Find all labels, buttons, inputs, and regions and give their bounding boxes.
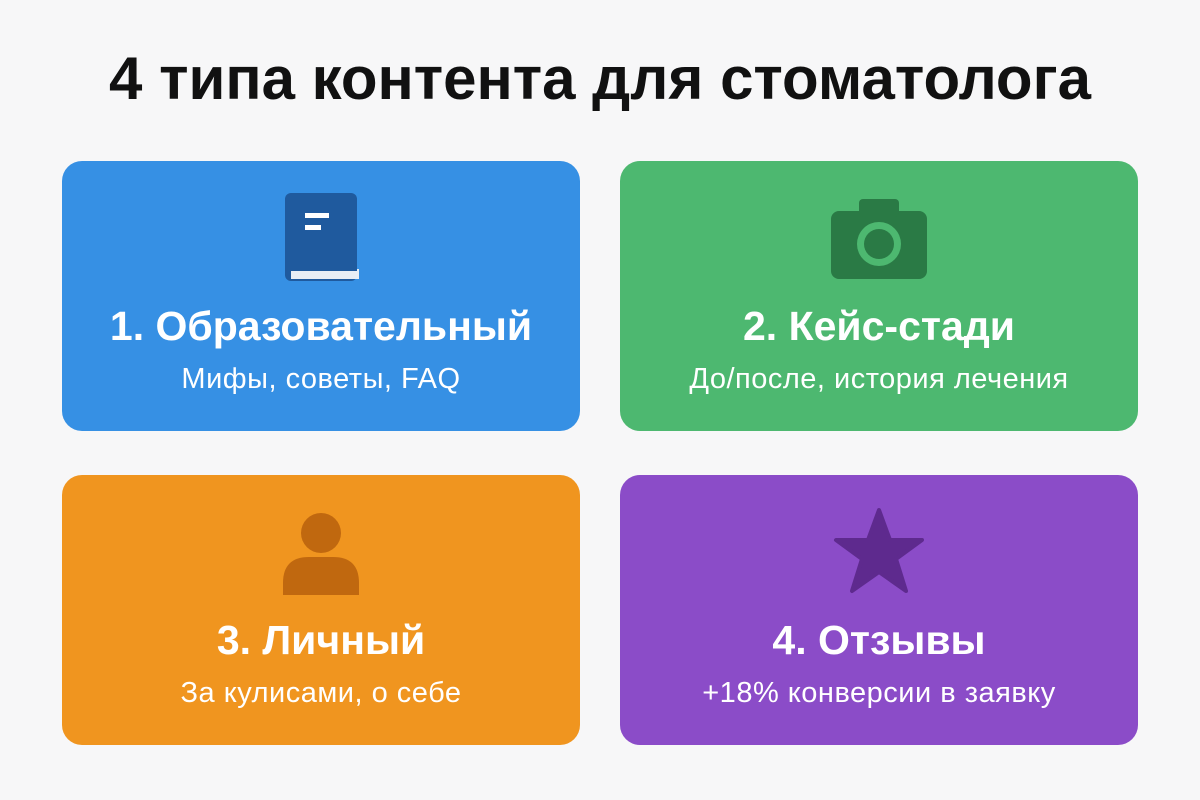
heading: 2. Кейс-стади	[743, 303, 1015, 349]
heading: 1. Образовательный	[110, 303, 532, 349]
panel: reviews	[620, 475, 1138, 745]
subtitle: Мифы, советы, FAQ	[181, 363, 461, 395]
subtitle: До/после, история лечения	[689, 363, 1069, 395]
icon: book	[285, 193, 359, 281]
icon: person	[283, 513, 359, 595]
subtitle: +18% конверсии в заявку	[702, 677, 1056, 709]
subtitle: За кулисами, о себе	[180, 677, 461, 709]
panel: case study	[620, 161, 1138, 431]
title: 4 типа контента для стоматолога	[109, 45, 1091, 112]
icon: camera	[831, 199, 927, 279]
icon: star	[834, 508, 924, 594]
panel: personal	[62, 475, 580, 745]
panel: educational	[62, 161, 580, 431]
heading: 4. Отзывы	[772, 617, 986, 663]
heading: 3. Личный	[217, 617, 425, 663]
